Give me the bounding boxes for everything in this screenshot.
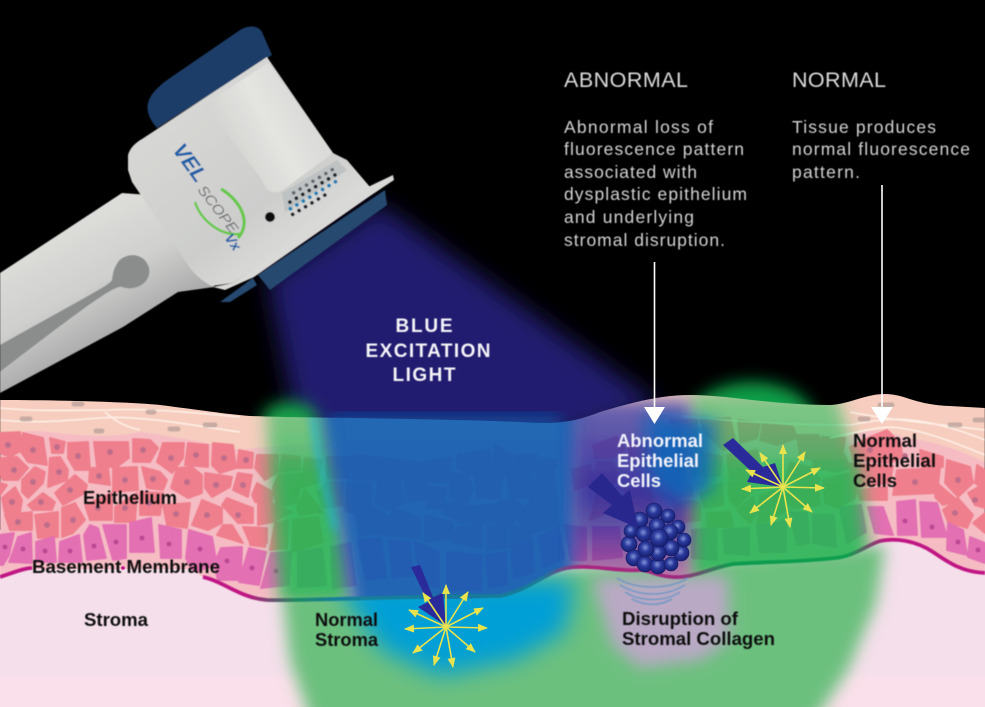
epithelium base — [0, 390, 985, 605]
label: abnormal epithelial cells: Epithelial — [617, 451, 699, 471]
excitation arrow: normal epithelium — [723, 438, 783, 487]
flange rim — [213, 175, 394, 290]
text: abnormal description: fluorescence pattern — [564, 139, 744, 159]
excitation arrow: normal stroma — [411, 565, 446, 626]
disrupted stroma patch — [592, 575, 730, 668]
label: disruption of stromal collagen: Disruption of — [622, 609, 739, 629]
label: blue excitation light — [366, 316, 490, 386]
label: basement membrane: Basement Membrane — [32, 557, 220, 577]
arrow: normal — [871, 185, 893, 424]
VELscope device — [0, 26, 394, 393]
basement membrane — [0, 540, 985, 600]
epithelium — [0, 390, 985, 615]
text: normal description: Tissue produces — [792, 117, 936, 137]
device head — [128, 57, 370, 286]
label: normal epithelial cells — [853, 431, 936, 491]
text: abnormal description: stromal disruption. — [564, 230, 725, 250]
superficial keratin layer — [0, 395, 985, 462]
green epithelial fluorescence — [265, 392, 872, 605]
blue epithelial fluorescence — [310, 416, 590, 599]
blue excitation light beam — [268, 205, 660, 440]
text: abnormal description: dysplastic epithelium — [564, 184, 747, 204]
label: normal epithelial cells: Normal — [853, 431, 917, 451]
upper epithelial cells — [0, 430, 985, 543]
label: normal epithelial cells: Epithelial — [853, 451, 936, 471]
logo SCOPE: SCOPE — [195, 182, 242, 237]
label: normal stroma: Stroma — [315, 630, 379, 650]
label: normal stroma: Normal — [315, 610, 378, 630]
text: abnormal description: Abnormal loss of — [564, 117, 713, 137]
stroma fluorescence — [282, 545, 885, 707]
cell nuclei — [8, 445, 975, 525]
label: blue excitation light: LIGHT — [392, 365, 456, 386]
label: abnormal epithelial cells: Abnormal — [617, 431, 703, 451]
logo VEL: VEL — [168, 139, 211, 187]
label: blue excitation light: BLUE — [396, 316, 452, 337]
head top panel — [205, 63, 333, 192]
text: normal description — [792, 117, 970, 182]
logo Vx: Vx — [222, 230, 245, 255]
text: abnormal description: and underlying — [564, 207, 694, 227]
cyan edge glow — [312, 415, 335, 530]
stroma — [0, 530, 985, 707]
cells under the fluorescence regions — [250, 418, 857, 552]
green logo swoosh — [195, 189, 244, 238]
label: disruption of stromal collagen: Stromal Collagen — [622, 629, 775, 649]
text: normal description: normal fluorescence — [792, 139, 970, 159]
green glow above tissue — [262, 382, 814, 458]
label: normal epithelial cells: Cells — [853, 471, 897, 491]
cyan stromal fluorescence — [335, 580, 575, 676]
green stromal fluorescence — [282, 545, 885, 707]
basal nuclei — [5, 521, 978, 571]
blue patch beside abnormal cells — [645, 415, 716, 505]
handle — [0, 193, 214, 393]
label: stroma: Stroma — [84, 610, 149, 630]
label: blue excitation light: EXCITATION — [366, 341, 490, 362]
abnormal loss of fluorescence — [574, 400, 690, 585]
label: normal stroma — [315, 610, 379, 650]
heading: abnormal: ABNORMAL — [564, 68, 688, 92]
ventilation grille — [282, 160, 347, 214]
basal epithelial cells — [0, 500, 985, 588]
camera port — [265, 212, 275, 222]
device flange — [258, 190, 387, 290]
text: normal description: pattern. — [792, 162, 860, 182]
abnormal cell cluster — [621, 503, 691, 574]
fluorescence burst: normal epithelium — [742, 445, 824, 527]
large incoming arrow to abnormal cells — [588, 473, 638, 528]
arrow: abnormal — [644, 262, 665, 424]
heading: normal: NORMAL — [792, 68, 886, 92]
grip inset — [0, 255, 149, 372]
superficial layer details — [0, 404, 985, 455]
device rear cap — [147, 26, 272, 128]
label: abnormal epithelial cells — [617, 431, 703, 491]
label: epithelium: Epithelium — [83, 488, 177, 508]
text: abnormal description: associated with — [564, 162, 697, 182]
basal cells under the fluorescence regions — [298, 505, 866, 590]
label: disruption of stromal collagen — [622, 609, 775, 649]
label: abnormal epithelial cells: Cells — [617, 471, 661, 491]
fluorescence burst: normal stroma — [405, 585, 487, 667]
disruption of stromal collagen — [617, 578, 688, 604]
text: abnormal description — [564, 117, 747, 250]
blue glow above tissue — [330, 416, 560, 432]
